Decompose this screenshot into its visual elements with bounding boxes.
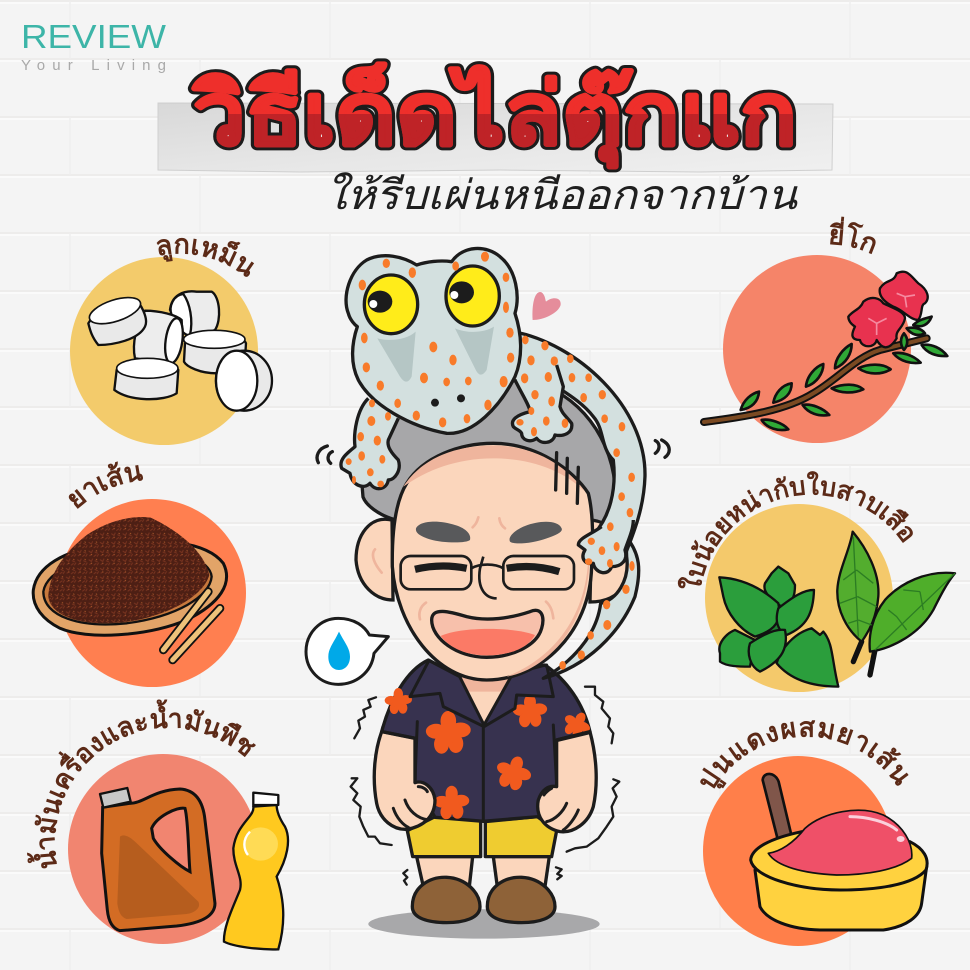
gecko left leg (341, 398, 399, 489)
label: tobacco: ยาเส้น (68, 461, 143, 509)
character: man with gecko on head (306, 248, 669, 939)
speech bubble with water drop (306, 618, 388, 684)
open neck (459, 677, 511, 725)
panel: mothballs (70, 238, 274, 445)
circle: yellow background (705, 504, 893, 692)
icon: tray of tobacco with sticks (33, 517, 227, 660)
circle: yellow background (70, 257, 258, 445)
panel: tobacco (32, 461, 246, 687)
shirt (382, 660, 590, 821)
legs (417, 857, 549, 887)
gecko rear foot (578, 520, 633, 573)
right arm (538, 732, 596, 832)
glasses (401, 556, 574, 598)
title: วิธีเด็ดไล่ตุ๊กแก (191, 62, 797, 168)
head and face (392, 443, 593, 680)
panel: yi-kho (700, 216, 949, 443)
label: oils: น้ำมันเครื่องและน้ำมันพืช (27, 700, 256, 868)
heart (532, 292, 561, 320)
head hair lines (556, 453, 578, 503)
icon: red flower branch (704, 272, 947, 430)
left arm (374, 732, 435, 829)
ears (356, 519, 629, 602)
icon: oil jug (100, 788, 215, 931)
circle: orange background (58, 499, 246, 687)
gecko front leg (512, 365, 572, 442)
panel: custard apple and Siam weed leaves (678, 471, 956, 692)
gecko tail (543, 537, 639, 678)
panel: red lime mixed with tobacco (700, 720, 929, 946)
shirt collar and placket (410, 662, 557, 820)
mouth (432, 610, 543, 657)
sleeve edges (382, 732, 590, 741)
gecko orange spots (346, 252, 635, 568)
label: yi-kho: ยี่โก (830, 216, 876, 254)
ear shading (373, 549, 382, 573)
title: วิธีเด็ดไล่ตุ๊กแก (191, 62, 797, 168)
label: mothballs: ลูกเหม็น (156, 238, 254, 277)
grey hair (362, 380, 615, 530)
circle: salmon background (68, 754, 258, 944)
gecko back fill (513, 332, 563, 387)
gecko body (513, 332, 645, 555)
shake lines (351, 687, 619, 885)
eyebrows (416, 522, 562, 543)
icon: Siam weed leaves (837, 532, 955, 675)
forehead frown and cheek lines (419, 517, 553, 619)
logo: Review Your Living: REVIEW (21, 18, 167, 55)
subtitle: ให้รีบเผ่นหนีออกจากบ้าน (325, 172, 798, 218)
fingers (393, 787, 578, 830)
label: red lime: ปูนแดงผสมยาเส้น (700, 720, 908, 789)
circle: salmon background (723, 255, 911, 443)
gecko cheek shading (377, 327, 494, 382)
wiggle marks beside gecko (317, 440, 669, 463)
circle: orange background (703, 756, 893, 946)
logo: Review Your Living: Your Living (21, 57, 166, 74)
closed eyes (415, 566, 559, 572)
gecko (317, 248, 669, 573)
icon: mint-like custard apple leaves (719, 567, 838, 687)
icon: mothball tablets (86, 291, 272, 411)
shoes (412, 877, 555, 923)
label: leaves: ใบน้อยหน่ากับใบสาบเสือ (678, 471, 913, 588)
icon: bowl of red lime (751, 774, 927, 930)
logo: Review Your Living (21, 18, 167, 74)
character body: ground shadow, shoes, shorts, shirt and arms (306, 618, 619, 939)
panel: engine and vegetable oil (27, 700, 290, 951)
title: วิธีเด็ดไล่ตุ๊กแก (191, 62, 797, 168)
gecko head (346, 248, 521, 433)
title banner: torn paper strip (158, 103, 833, 172)
ground shadow (368, 909, 600, 939)
shirt flowers (385, 688, 595, 819)
gecko eyes (364, 275, 418, 334)
shorts (407, 817, 557, 857)
icon: vegetable oil bottle (224, 793, 288, 949)
